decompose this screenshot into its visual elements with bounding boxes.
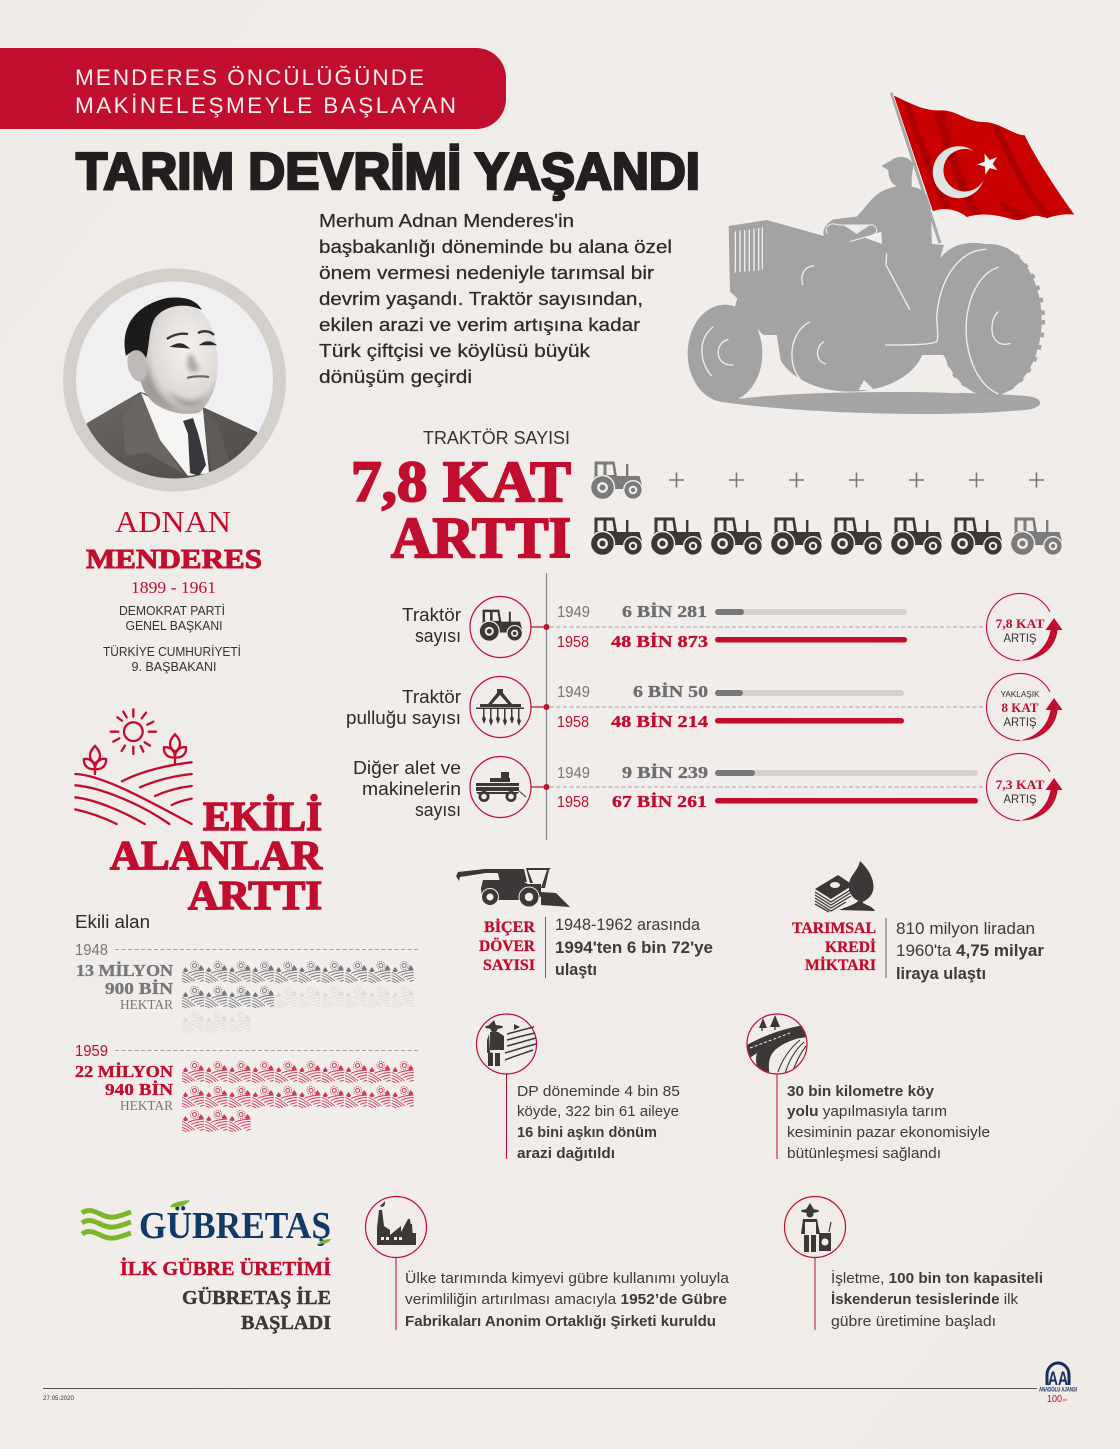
intro paragraph: dönüşüm geçirdi: [319, 366, 472, 387]
surname: MENDERES: [86, 544, 262, 574]
icon: green waves: [82, 1211, 131, 1238]
tractor count headline: TRAKTÖR SAYISI: [423, 428, 570, 448]
land distribution note: [476, 1014, 680, 1162]
banner text line 1: MENDERES ÖNCÜLÜĞÜNDE: [75, 65, 424, 90]
land distribution note: köyde, 322 bin 61 aileye: [517, 1104, 679, 1120]
cultivated area 1959: 940 BİN: [105, 1080, 174, 1099]
ear: [127, 350, 146, 382]
date: 27.05.2020: [43, 1395, 74, 1402]
agricultural credit stat: [792, 861, 1045, 983]
agricultural credit stat: MİKTARI: [805, 957, 876, 974]
intro paragraph: Türk çiftçisi ve köylüsü büyük: [319, 340, 591, 361]
cultivated area 1948: 13 MİLYON: [76, 961, 174, 980]
row: tractors: Traktör: [402, 605, 461, 625]
row: other machinery: sayısı: [415, 800, 461, 820]
neck and face: [136, 301, 218, 414]
star: [977, 154, 997, 175]
land distribution note: 16 bini aşkın dönüm: [517, 1125, 657, 1141]
name block: [86, 504, 262, 674]
portrait: Adnan Menderes: [70, 275, 280, 500]
row: ploughs: 6 BİN 50: [633, 682, 708, 701]
row: ploughs: 8 KAT: [1002, 700, 1039, 715]
Iskenderun plant note: İşletme, 100 bin ton kapasiteli: [831, 1269, 1043, 1287]
icon: farmer with fertilizer sack: [801, 1203, 831, 1252]
intro paragraph: önem vermesi nedeniyle tarımsal bir: [319, 262, 654, 283]
intro paragraph: başbakanlığı döneminde bu alana özel: [319, 236, 672, 257]
icon: farmer in field: [485, 1020, 536, 1066]
tractor count headline: [351, 428, 571, 570]
hair: [125, 298, 202, 358]
row: other machinery: [353, 754, 1062, 821]
land distribution note: arazi dağıtıldı: [517, 1146, 615, 1162]
row: other machinery: ARTIŞ: [1004, 794, 1037, 806]
row: other machinery: 1958: [557, 794, 589, 811]
agricultural credit stat: TARIMSAL: [792, 920, 876, 937]
icon: money stack and leaf: [815, 861, 875, 912]
row: tractors: 1958: [557, 634, 589, 651]
titles: 9. BAŞBAKANI: [132, 660, 216, 674]
Anadolu Agency logo: ANADOLU AJANSI: [1039, 1388, 1077, 1394]
Gubretas logo: GÜBRETAŞ: [139, 1205, 331, 1247]
agricultural credit stat: 810 milyon liradan: [896, 920, 1035, 938]
cultivated area 1959: [75, 1043, 418, 1132]
cultivated area 1948: [75, 942, 418, 1033]
ground gaps: [752, 225, 959, 395]
flag pole: [891, 93, 940, 243]
eyes and mouth: [167, 331, 214, 339]
row: ploughs: Traktör: [402, 687, 461, 707]
row: other machinery: 1949: [557, 765, 590, 782]
illustration: farmer on tractor with Turkish flag: [688, 93, 1075, 414]
row: other machinery: Diğer alet ve: [353, 758, 461, 778]
name block: ADNAN: [115, 504, 231, 539]
village roads note: yolu yapılmasıyla tarım: [787, 1104, 947, 1120]
7,8 KAT: 7,8 KAT: [351, 449, 571, 514]
lapel: [124, 416, 184, 474]
titles: TÜRKİYE CUMHURİYETİ: [103, 645, 241, 659]
field pictograms 1948: [182, 962, 414, 1008]
Gubretas logo: [82, 1200, 331, 1247]
fertilizer factories note: Fabrikaları Anonim Ortaklığı Şirketi kuruldu: [405, 1314, 716, 1330]
agricultural credit stat: KREDİ: [825, 939, 876, 956]
row: tractors: [402, 594, 1062, 661]
Iskenderun plant note: İskenderun tesislerinde ilk: [831, 1291, 1019, 1308]
row: tractors: 6 BİN 281: [622, 602, 707, 621]
cultivated area 1959: HEKTAR: [120, 1099, 174, 1114]
row: ploughs: pulluğu sayısı: [346, 708, 461, 728]
row: other machinery: 7,3 KAT: [996, 777, 1045, 792]
life years: 1899 - 1961: [131, 578, 216, 597]
tie: [183, 418, 206, 476]
agricultural credit stat: liraya ulaştı: [896, 965, 986, 983]
cultivated area 1948: 1948: [75, 942, 108, 959]
comparison chart: machinery: [346, 573, 1062, 840]
combine harvester stat: ulaştı: [555, 961, 597, 979]
combine harvester stat: DÖVER: [479, 938, 536, 955]
heading: cultivated areas increased: EKİLİ: [203, 793, 322, 839]
titles: GENEL BAŞKANI: [126, 619, 222, 633]
row: ploughs: YAKLAŞIK: [1000, 689, 1040, 699]
heading: cultivated areas increased: [110, 793, 322, 918]
Anadolu Agency logo: yıl: [1063, 1397, 1067, 1402]
icon: combine harvester: [456, 868, 570, 907]
icon: field with sun and sprouts: [75, 709, 192, 824]
heading: cultivated areas increased: ARTTI: [188, 872, 322, 918]
row: other machinery: 67 BİN 261: [612, 792, 707, 811]
intro paragraph: Merhum Adnan Menderes'in: [319, 210, 574, 231]
titles: [103, 604, 241, 674]
cultivated area 1948: HEKTAR: [120, 998, 174, 1013]
row: ploughs: 48 BİN 214: [611, 712, 709, 731]
heading line 3: BAŞLADI: [241, 1312, 331, 1334]
cultivated area 1959: 22 MİLYON: [75, 1062, 174, 1081]
row: tractors: sayısı: [415, 626, 461, 646]
intro paragraph: [319, 210, 672, 387]
header banner: [0, 48, 506, 129]
row: tractors: 1949: [557, 604, 590, 621]
titles: DEMOKRAT PARTİ: [119, 604, 225, 618]
icon: factory: [377, 1201, 416, 1245]
row: tractors: 7,8 KAT: [996, 616, 1045, 631]
Anadolu Agency logo: AA: [1048, 1369, 1068, 1390]
fertilizer factories note: Ülke tarımında kimyevi gübre kullanımı yoluyla: [405, 1269, 730, 1287]
Turkish flag: [893, 95, 1075, 220]
fertilizer factories note: verimliliğin artırılması amacıyla 1952’de Gübre: [405, 1292, 727, 1308]
village roads note: 30 bin kilometre köy: [787, 1084, 934, 1100]
row: other machinery: 9 BİN 239: [622, 763, 708, 782]
agricultural credit stat: 1960'ta 4,75 milyar: [896, 942, 1045, 960]
Anadolu Agency logo: [1039, 1363, 1077, 1405]
row: ploughs: 1949: [557, 684, 590, 701]
crescent: [933, 146, 983, 198]
heading: cultivated areas increased: ALANLAR: [110, 832, 322, 878]
village roads note: [747, 1014, 990, 1162]
combine harvester stat: 1948-1962 arasında: [555, 916, 701, 934]
fertilizer heading: [120, 1256, 331, 1334]
Anadolu Agency logo: 100: [1047, 1394, 1062, 1405]
row: ploughs: [346, 674, 1062, 741]
main title: TARIM DEVRİMİ YAŞANDI: [76, 143, 700, 201]
row: tractors: ARTIŞ: [1004, 633, 1037, 645]
icon: trailer: [476, 772, 526, 802]
heading line 2: GÜBRETAŞ İLE: [182, 1285, 331, 1309]
fertilizer factories note: [366, 1196, 730, 1330]
banner text line 2: MAKİNELEŞMEYLE BAŞLAYAN: [75, 93, 456, 118]
flag folds: [904, 102, 1053, 219]
village roads note: kesiminin pazar ekonomisiyle: [787, 1125, 990, 1141]
Iskenderun plant note: gübre üretimine başladı: [831, 1314, 996, 1330]
cultivated area 1948: 900 BİN: [105, 979, 174, 998]
tractor silhouette: [688, 157, 1043, 402]
combine harvester stat: SAYISI: [483, 957, 535, 974]
combine harvester stat: [456, 868, 713, 979]
icon: road and trees: [747, 1015, 808, 1076]
footer line: [43, 1388, 1037, 1390]
intro paragraph: devrim yaşandı. Traktör sayısından,: [319, 288, 643, 309]
tractor shadow: [720, 392, 1040, 414]
row: ploughs: 1958: [557, 714, 589, 731]
village roads note: bütünleşmesi sağlandı: [787, 1146, 941, 1162]
tractor highlights: [702, 224, 1011, 394]
face shading: [145, 352, 208, 410]
cultivated area 1959: 1959: [75, 1043, 108, 1060]
land distribution note: DP döneminde 4 bin 85: [517, 1084, 680, 1100]
suit: [86, 392, 258, 478]
tractor pictogram grid: [590, 462, 1062, 556]
combine harvester stat: BİÇER: [484, 919, 536, 936]
row: tractors: 48 BİN 873: [611, 632, 708, 651]
row: other machinery: makinelerin: [362, 779, 461, 799]
cultivated area label: Ekili alan: [75, 912, 150, 932]
intro paragraph: ekilen arazi ve verim artışına kadar: [319, 314, 640, 335]
fertilizer heading: İLK GÜBRE ÜRETİMİ: [120, 1256, 331, 1280]
ARTTI: ARTTI: [391, 505, 571, 570]
row: ploughs: ARTIŞ: [1004, 717, 1037, 729]
shirt: [141, 393, 209, 476]
field pictograms 1959: [182, 1062, 414, 1132]
combine harvester stat: 1994'ten 6 bin 72'ye: [555, 939, 713, 957]
icon: plough: [476, 689, 524, 726]
Iskenderun plant note: [784, 1196, 1043, 1330]
